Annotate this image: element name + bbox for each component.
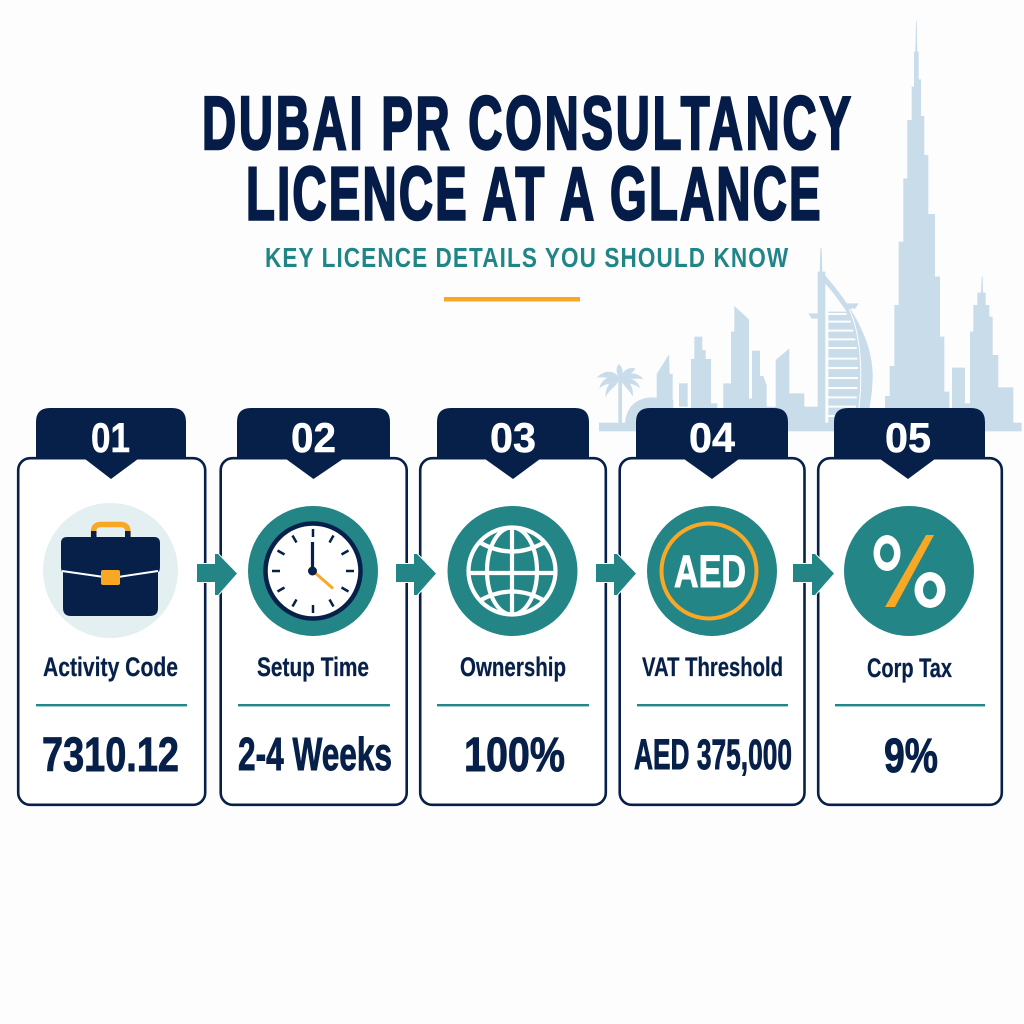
- badge 05: [834, 408, 985, 479]
- panel: card 05 corp tax: [818, 408, 1002, 805]
- skyline: right towers: [952, 277, 1013, 423]
- value: 7310.12: 7310.12: [42, 729, 179, 782]
- value: 9%: 9%: [884, 730, 938, 783]
- skyline: ground strip: [599, 423, 1022, 431]
- skyline background: [597, 21, 1022, 431]
- panel: card 01 activity code: [18, 408, 205, 805]
- skyline: left buildings: [657, 306, 820, 423]
- badge 04: [636, 408, 788, 479]
- badge 03: 03: [490, 414, 536, 461]
- badge 02: [237, 408, 390, 479]
- title: DUBAI PR CONSULTANCY: [202, 82, 851, 166]
- title: [202, 82, 851, 236]
- icon: globe: [448, 506, 578, 636]
- badge 01: 01: [91, 414, 130, 461]
- skyline: Burj Khalifa: [885, 21, 949, 423]
- label: activity code: Activity Code: [43, 652, 178, 682]
- label: corp tax: Corp Tax: [867, 653, 952, 683]
- arrow: 01 to 02: [197, 554, 237, 595]
- skyline: dome: [625, 397, 673, 423]
- arrow: 04 to 05: [793, 554, 834, 595]
- badge 03: [437, 408, 589, 479]
- badge 01: [36, 408, 186, 479]
- value: 100%: 100%: [464, 729, 565, 782]
- badge 05: 05: [885, 414, 931, 461]
- value: 2-4 weeks: 2-4 Weeks: [238, 728, 392, 780]
- subtitle: KEY LICENCE DETAILS YOU SHOULD KNOW: [265, 243, 788, 274]
- icon: briefcase: [43, 503, 178, 638]
- title: LICENCE AT A GLANCE: [246, 152, 821, 236]
- icon: percent: [844, 506, 974, 636]
- skyline: Burj Al Arab: [808, 248, 873, 423]
- badge 04: 04: [689, 414, 736, 461]
- skyline: palm tree: [597, 364, 643, 423]
- panel: card 02 setup time: [221, 408, 407, 805]
- panel: card 03 ownership: [420, 408, 606, 805]
- arrow: 02 to 03: [396, 554, 436, 595]
- label: ownership: Ownership: [460, 652, 566, 682]
- value: AED 375,000: AED 375,000: [634, 731, 792, 779]
- panel: card 04 vat threshold: [620, 408, 804, 805]
- orange accent rule: [444, 297, 580, 302]
- label: vat threshold: VAT Threshold: [642, 652, 783, 682]
- icon: AED coin: [647, 506, 777, 636]
- label: setup time: Setup Time: [257, 652, 369, 682]
- arrow: 03 to 04: [596, 554, 636, 595]
- badge 02: 02: [291, 414, 336, 461]
- icon: AED coin: AED: [674, 546, 746, 597]
- icon: clock: [248, 506, 378, 636]
